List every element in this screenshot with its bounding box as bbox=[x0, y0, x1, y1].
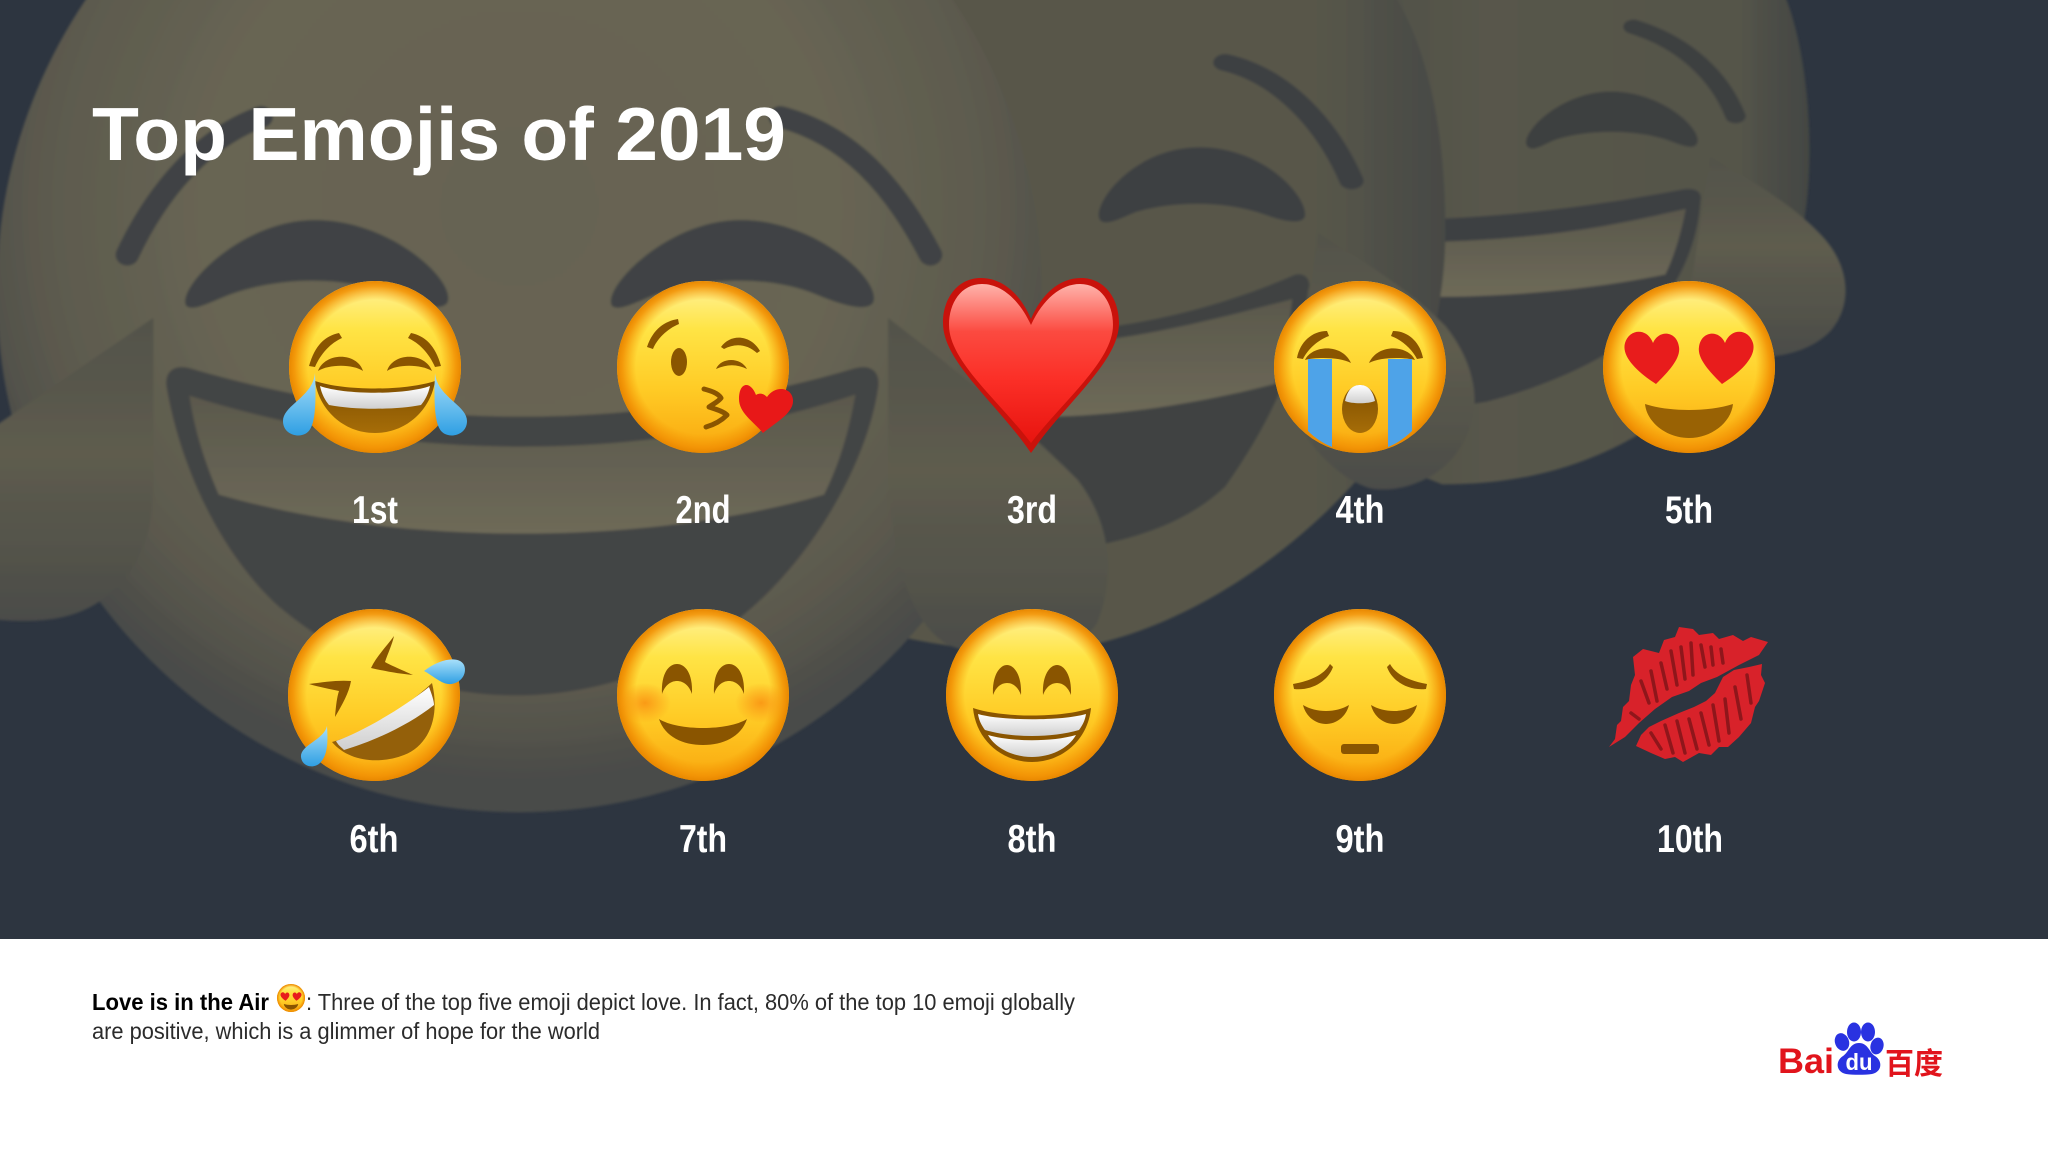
label 8th: 8th bbox=[1008, 818, 1056, 861]
footer bold lead-in: Love is in the Air bbox=[92, 989, 269, 1015]
emoji 5th: heart eyes bbox=[1603, 281, 1775, 453]
logo du: du bbox=[1846, 1049, 1872, 1075]
label 6th: 6th bbox=[350, 818, 398, 861]
ghost left brow bbox=[127, 117, 261, 255]
ghost mouth bbox=[166, 367, 879, 695]
label 7th: 7th bbox=[679, 818, 727, 861]
label 1st: 1st bbox=[352, 489, 398, 532]
ghost right tear bbox=[888, 318, 1108, 659]
ghost face: far right bbox=[1346, 0, 1846, 484]
emoji 2nd: face blowing a kiss bbox=[617, 281, 793, 453]
ghost face: middle bbox=[709, 0, 1474, 651]
logo chinese wordmark: 百度 bbox=[1885, 1048, 1943, 1081]
label 5th: 5th bbox=[1665, 489, 1713, 532]
logo wordmark Bai: Bai bbox=[1778, 1042, 1834, 1081]
ghost right brow bbox=[780, 117, 931, 255]
emoji 1st: face with tears of joy bbox=[283, 281, 467, 453]
emoji 7th: smiling face with smiling eyes bbox=[617, 609, 789, 781]
ghost right eye bbox=[611, 220, 874, 308]
emoji 4th: loudly crying face bbox=[1274, 281, 1446, 453]
label 9th: 9th bbox=[1336, 818, 1384, 861]
ghost teeth bbox=[189, 394, 855, 534]
footer white panel bbox=[0, 939, 2048, 1152]
emoji 8th: beaming face bbox=[946, 609, 1118, 781]
label 2nd: 2nd bbox=[676, 489, 730, 532]
emoji 3rd: red heart bbox=[943, 278, 1119, 453]
ghost face: large front bbox=[0, 0, 1108, 812]
ghost left eye bbox=[185, 220, 448, 308]
background: ghosted laughing faces bbox=[0, 0, 1846, 812]
title: Top Emojis of 2019 bbox=[92, 92, 786, 176]
label 4th: 4th bbox=[1336, 489, 1384, 532]
lip creases bbox=[1631, 643, 1751, 753]
footer sentence line 1: : Three of the top five emoji depict love. In fact, 80% of the top 10 emoji globally bbox=[306, 989, 1075, 1015]
emoji 9th: pensive face bbox=[1274, 609, 1446, 781]
Baidu logo bbox=[1778, 1022, 1943, 1081]
label 10th: 10th bbox=[1657, 818, 1723, 861]
logo paw bbox=[1832, 1022, 1885, 1075]
ghost left tear bbox=[0, 318, 153, 621]
emoji 6th: rolling on the floor laughing bbox=[288, 609, 465, 781]
emoji 10th: kiss mark lips bbox=[1609, 627, 1768, 762]
inline heart-eyes emoji bbox=[277, 984, 305, 1012]
footer sentence line 2: are positive, which is a glimmer of hope for the world bbox=[92, 1018, 600, 1044]
footer text block bbox=[92, 984, 1075, 1044]
label 3rd: 3rd bbox=[1007, 489, 1057, 532]
